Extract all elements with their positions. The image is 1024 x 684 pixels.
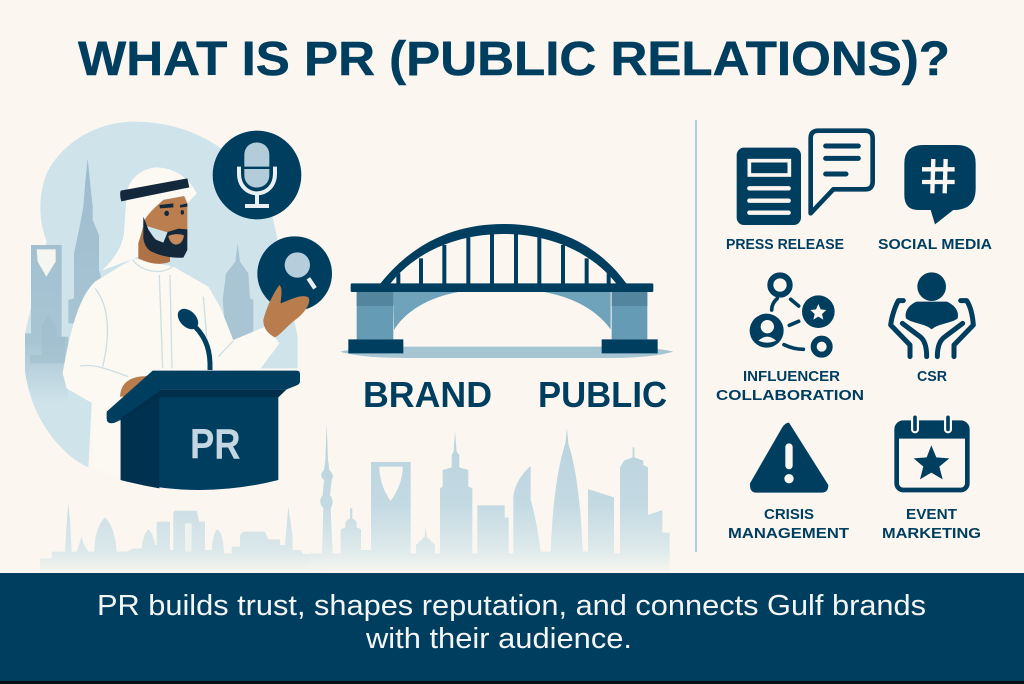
podium side bbox=[121, 393, 159, 488]
water shadow bbox=[340, 347, 673, 358]
gesturing hand bbox=[263, 285, 309, 337]
eyes and brows bbox=[159, 203, 187, 216]
activity labels: PRESS RELEASE bbox=[726, 237, 844, 253]
footer banner bbox=[0, 573, 1024, 684]
skyline: right section bbox=[310, 423, 670, 572]
hangers bbox=[398, 233, 609, 284]
activity labels: MARKETING bbox=[882, 526, 981, 542]
activity labels: SOCIAL MEDIA bbox=[878, 237, 993, 253]
activity labels: CSR bbox=[917, 369, 948, 385]
icon: magnifier circle bbox=[257, 236, 332, 311]
left skyline in backdrop bbox=[25, 158, 101, 410]
icon: press release bbox=[737, 131, 873, 225]
podium body bbox=[121, 390, 278, 490]
robe fold lines bbox=[80, 260, 233, 377]
activity labels: COLLABORATION bbox=[716, 388, 864, 404]
panel: speaker illustration bbox=[25, 122, 332, 490]
label: brand: BRAND bbox=[363, 374, 492, 415]
right skyline in backdrop bbox=[223, 243, 253, 343]
podium hand bbox=[120, 376, 147, 397]
footer text: PR builds trust, shapes reputation, and connects Gulf brands bbox=[97, 590, 926, 622]
icon: influencer network bbox=[750, 275, 835, 355]
deck bbox=[351, 283, 653, 292]
neck bbox=[138, 227, 170, 264]
microphone head bbox=[174, 305, 202, 333]
icon: social media bbox=[904, 145, 976, 224]
footer banner: with their audience. bbox=[365, 623, 632, 655]
face bbox=[143, 196, 187, 238]
beard bbox=[143, 217, 187, 258]
head cloth bbox=[102, 167, 197, 271]
title: WHAT IS PR (PUBLIC RELATIONS)? bbox=[78, 33, 950, 86]
icon: CSR bbox=[891, 272, 973, 357]
activity labels: EVENT bbox=[906, 507, 957, 523]
icon: microphone circle bbox=[213, 131, 301, 219]
activity labels bbox=[716, 237, 993, 542]
activity labels: INFLUENCER bbox=[743, 369, 841, 385]
head band bbox=[120, 178, 189, 201]
lower city skyline bbox=[40, 423, 670, 572]
skyline: faint left section bbox=[40, 503, 350, 572]
bases bbox=[348, 339, 658, 353]
podium label: PR bbox=[190, 420, 241, 468]
microphone stand bbox=[195, 327, 210, 370]
panel: PR activities bbox=[716, 131, 993, 542]
activity labels: CRISIS bbox=[764, 507, 814, 523]
label: public: PUBLIC bbox=[538, 374, 667, 415]
man robe bbox=[63, 258, 279, 478]
icon: crisis warning bbox=[750, 423, 828, 493]
divider bbox=[695, 120, 697, 552]
icon: event calendar bbox=[897, 417, 967, 490]
bridge bbox=[340, 224, 673, 358]
activity labels: MANAGEMENT bbox=[728, 526, 849, 542]
podium top bbox=[107, 371, 300, 423]
city backdrop shape bbox=[25, 122, 298, 467]
piers bbox=[357, 292, 647, 339]
kingdom tower opening bbox=[37, 249, 56, 277]
arch bbox=[380, 224, 627, 284]
bridge span fill bbox=[393, 292, 611, 330]
mouth bbox=[168, 234, 184, 245]
